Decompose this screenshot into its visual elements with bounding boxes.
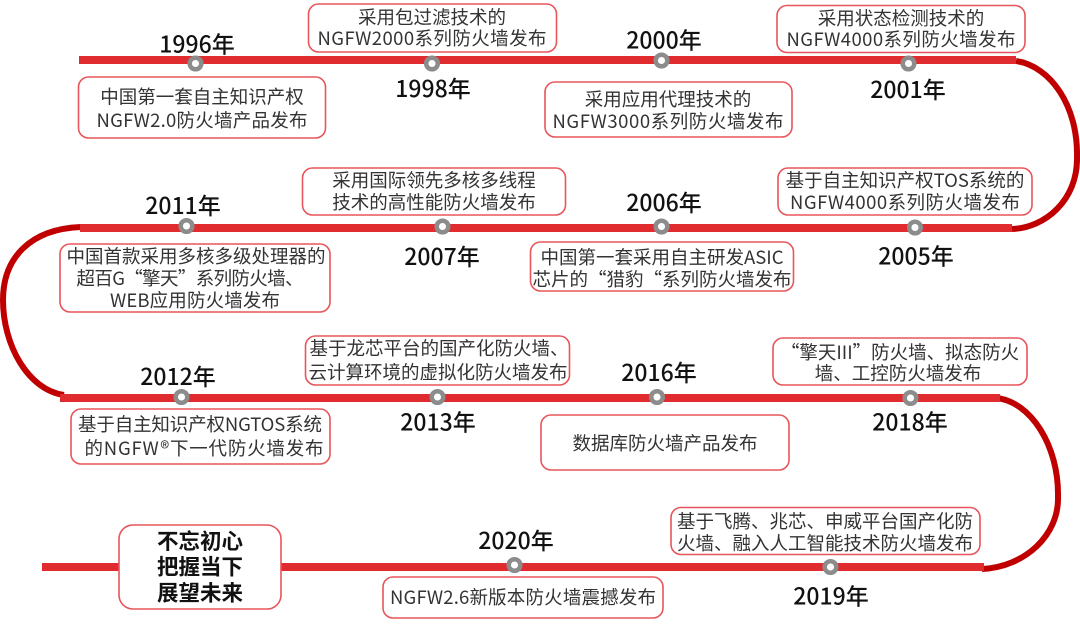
milestone 2020 [383,522,663,618]
milestone 2007: 2007年 [404,238,480,272]
milestone 2011: 2011年 [145,187,221,221]
milestone 2012: 2012年 [140,358,216,392]
milestone 2020: NGFW2.6新版本防火墙震撼发布 [390,584,656,610]
milestone 2013: 云计算环境的虚拟化防火墙发布 [308,359,568,385]
milestone 2011: 超百G“擎天”系列防火墙、 [76,265,304,291]
closing callout: 不忘初心 [157,525,243,556]
milestone 2005: NGFW4000系列防火墙发布 [790,189,1020,215]
milestone 2006: 2006年 [626,184,702,218]
milestone 2001: NGFW4000系列防火墙发布 [786,26,1016,52]
milestone 1996: 中国第一套自主知识产权 [100,84,304,110]
milestone 2018: 2018年 [872,404,948,438]
milestone 2007: 采用国际领先多核多线程 [332,167,536,193]
milestone 2018: “擎天III”防火墙、拟态防火 [781,339,1019,365]
milestone 2006: 中国第一套采用自主研发ASIC [540,244,784,270]
milestone 2020: 2020年 [478,522,554,556]
milestone 2011 [60,187,330,313]
milestone 2000 [545,22,792,137]
milestone 2000: NGFW3000系列防火墙发布 [552,108,784,134]
milestone 2016: 数据库防火墙产品发布 [572,430,758,456]
milestone 2018 [773,338,1027,438]
milestone 2006: 芯片的“猎豹“系列防火墙发布 [532,266,792,292]
milestone 2019: 基于飞腾、兆芯、申威平台国产化防 [677,508,973,534]
milestone 1996: NGFW2.0防火墙产品发布 [96,107,308,133]
milestone 2000: 采用应用代理技术的 [585,86,751,112]
milestone 2005 [778,167,1032,272]
milestone 2001: 采用状态检测技术的 [818,5,984,31]
milestone 2018: 墙、工控防火墙发布 [815,360,981,386]
milestone 2019: 火墙、融入人工智能技术防火墙发布 [677,530,973,556]
closing callout: 把握当下 [157,550,243,582]
milestone 2001 [777,5,1025,105]
milestone 1996: 1996年 [159,26,235,60]
closing callout: 展望未来 [157,576,243,608]
milestone 1998: NGFW2000系列防火墙发布 [318,25,546,51]
milestone 2011: 中国首款采用多核多级处理器的 [66,243,326,269]
milestone 2005: 2005年 [878,238,954,272]
milestone 2013 [306,335,570,438]
milestone 2006 [530,184,794,292]
closing callout [119,525,281,609]
milestone 2012: 的NGFW®下一代防火墙发布 [84,435,324,461]
milestone 2013: 2013年 [400,404,476,438]
milestone 2016: 2016年 [621,354,697,388]
milestone 1996 [78,26,326,138]
milestone 2007 [302,167,566,272]
milestone 2007: 技术的高性能防火墙发布 [332,189,536,215]
milestone 1998 [308,4,556,104]
milestone 1998: 1998年 [395,70,471,104]
milestone 2005: 基于自主知识产权TOS系统的 [786,167,1024,193]
milestone 2012: 基于自主知识产权NGTOS系统 [78,411,322,437]
milestone 2013: 基于龙芯平台的国产化防火墙、 [309,335,569,361]
milestone 2012 [71,358,330,464]
milestone 2011: WEB应用防火墙发布 [110,287,280,313]
milestone 2016 [541,354,789,470]
milestone 1998: 采用包过滤技术的 [358,4,506,30]
milestone 2000: 2000年 [626,22,702,56]
milestone 2019 [671,508,980,612]
milestone 2019: 2019年 [793,578,869,612]
milestone 2001: 2001年 [870,71,946,105]
